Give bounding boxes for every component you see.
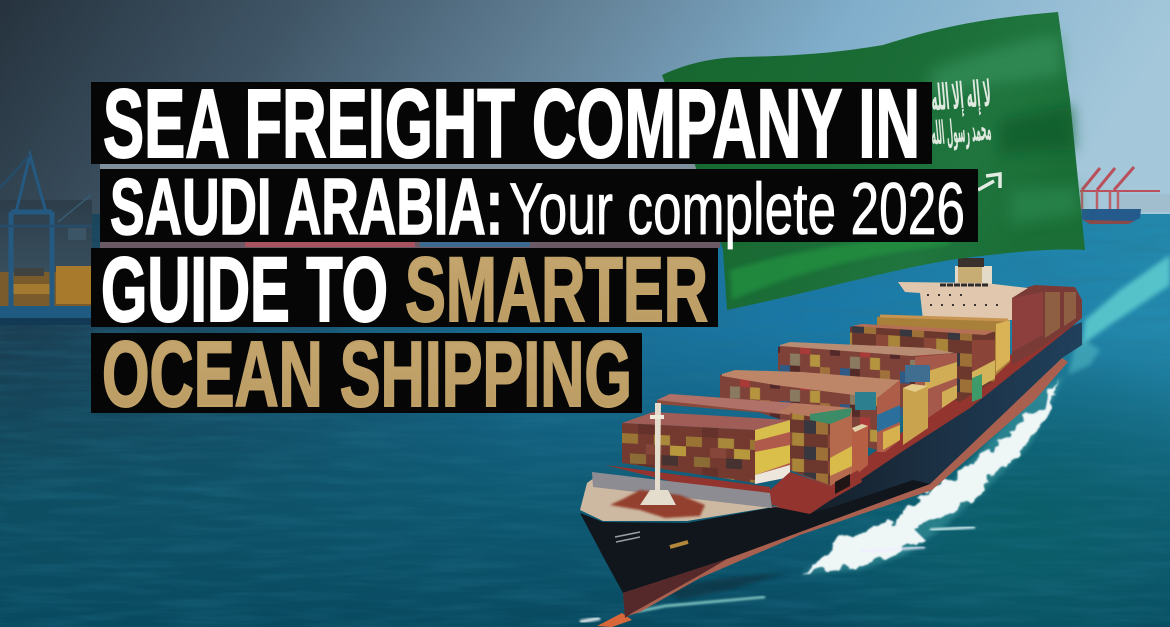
container stack 2 (657, 394, 852, 487)
saudi flag (662, 12, 1085, 310)
icon: left port crane and containers (0, 155, 91, 325)
bow deck (580, 478, 797, 521)
red stairs and side structure (770, 470, 862, 512)
container stack 1 (622, 423, 755, 483)
yellow filler stack (903, 386, 928, 445)
title: line 4: OCEAN SHIPPING (102, 322, 632, 426)
background: sky (0, 0, 1170, 260)
ship mast (640, 403, 676, 505)
container ship (580, 258, 1082, 627)
flag shahada calligraphy: لا إله إلا الله (929, 74, 993, 121)
background: sea (0, 214, 1170, 627)
red railing strip (605, 308, 1082, 514)
aft containers (1012, 285, 1082, 365)
red lower bow (623, 559, 727, 618)
hull black bow (580, 480, 930, 593)
icon: ship wake (580, 255, 1170, 622)
icon: right port cranes and distant ship (1080, 167, 1170, 224)
flag shahada calligraphy (929, 74, 993, 153)
background: distant port skyline (100, 164, 860, 248)
grey bow barrier (592, 472, 772, 508)
container stack 5 (850, 324, 995, 402)
title: line 3: SMARTER (405, 239, 708, 341)
flag sword (978, 174, 1000, 190)
container stack 4 (778, 343, 957, 423)
title: line 2: Your complete 2026 (509, 169, 965, 250)
saudi flag: محمد رسول الله (930, 110, 993, 153)
hull navy side (800, 322, 1082, 528)
bow tip (597, 613, 632, 627)
container stack 6 (877, 315, 1010, 378)
background: left hazy port sky (0, 200, 92, 322)
title: line 2 (100, 162, 978, 251)
hull underside band (597, 358, 1068, 626)
hull name mark (670, 542, 688, 547)
title: line 2: SAUDI ARABIA: (110, 162, 503, 251)
superstructure bridge (898, 282, 1028, 320)
superstructure funnel (955, 266, 992, 284)
bow red machinery (610, 490, 705, 518)
title: line 3: GUIDE TO (101, 239, 388, 341)
title: line 4 (91, 322, 642, 426)
container stack 3 (720, 370, 900, 452)
